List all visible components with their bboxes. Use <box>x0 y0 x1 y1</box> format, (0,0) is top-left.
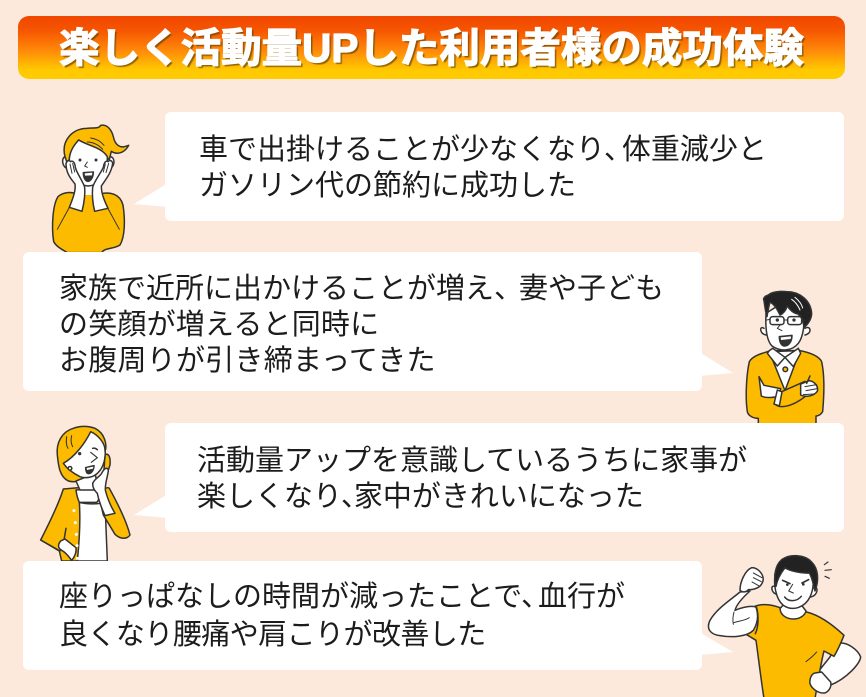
bubble 2 text <box>59 273 664 377</box>
bubble 3 text: 活動量アップを意識しているうちに家事が <box>197 445 747 477</box>
bubble 1 text: 車で出掛けることが少なくなり、体重減少と <box>199 134 767 166</box>
title banner: 楽しく活動量UPした利用者様の成功体験 <box>59 25 804 71</box>
bubble 2 text: 家族で近所に出かけることが増え、妻や子ども <box>59 273 664 305</box>
bubble 1 text: ガソリン代の節約に成功した <box>199 170 576 202</box>
icon: surprised woman with ponytail <box>53 125 129 253</box>
bubble 3 text: 楽しくなり、家中がきれいになった <box>197 481 644 513</box>
bubble 4 text: 座りっぱなしの時間が減ったことで、血行が <box>59 581 625 613</box>
speech bubble 4 <box>23 561 733 670</box>
bubble 1 text <box>199 134 767 202</box>
bubble 3 text <box>197 445 747 513</box>
speech bubble 1 <box>134 112 844 221</box>
speech bubble 3 <box>134 423 844 532</box>
bubble 2 text: の笑顔が増えると同時に <box>59 309 379 341</box>
icon: muscular man flexing <box>708 556 861 697</box>
icon: woman on the phone <box>41 426 130 561</box>
title banner <box>18 16 845 79</box>
icon: man with glasses and crossed arms <box>746 291 824 424</box>
bubble 2 text: お腹周りが引き締まってきた <box>59 345 436 377</box>
speech bubble 2 <box>23 252 733 391</box>
bubble 4 text <box>59 581 625 651</box>
bubble 4 text: 良くなり腰痛や肩こりが改善した <box>59 619 486 651</box>
